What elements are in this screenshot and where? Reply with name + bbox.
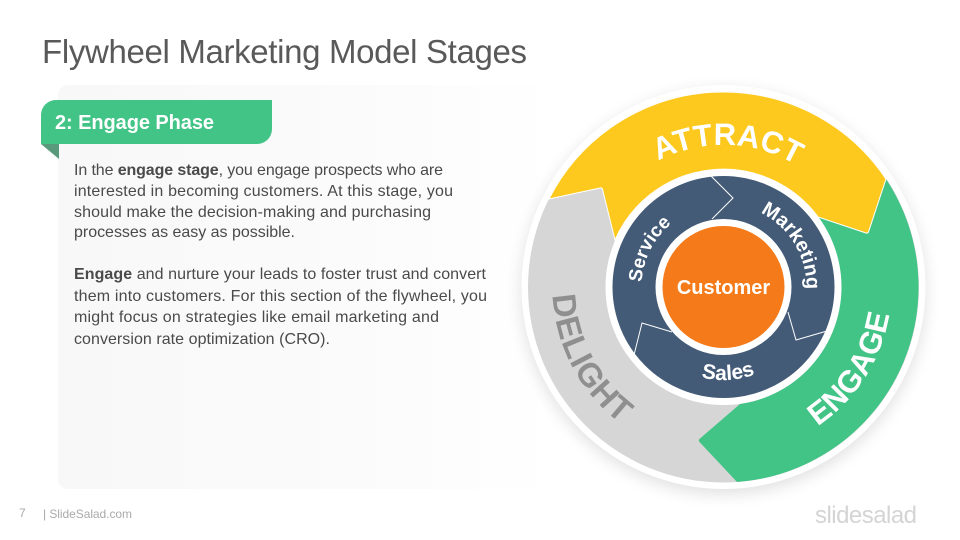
text block: engage description: should make the decision-making and purchasing [74, 204, 431, 221]
footer: page number: 7 [19, 506, 26, 520]
text block: engage description [74, 162, 487, 348]
label: customer: Customer [677, 277, 770, 299]
text block: engage description: Engage and nurture your leads to foster trust and convert [74, 266, 487, 283]
label: sales: Sales [702, 364, 754, 380]
text block: engage description: conversion rate optimization (CRO). [74, 331, 330, 348]
text block: engage description: them into customers. For this section of the flywheel, you [74, 288, 487, 305]
label: service: Service [629, 218, 670, 282]
heading banner: 2: Engage Phase: 2: Engage Phase [55, 112, 214, 134]
label: engage: ENGAGE [806, 312, 890, 426]
segment: delight [528, 92, 919, 482]
text block: engage description: interested in becoming customers. At this stage, you [74, 183, 453, 200]
inner ring dividers [634, 176, 827, 355]
heading banner: 2: Engage Phase [41, 100, 272, 159]
text block: engage description: might focus on strategies like email marketing and [74, 309, 439, 326]
centre ring [656, 219, 792, 355]
label: attract: ATTRACT [657, 124, 806, 162]
inner ring separator [606, 169, 842, 405]
inner ring: service, marketing, sales [612, 176, 834, 398]
flywheel diagram [517, 92, 930, 498]
footer: site name: | SlideSalad.com [43, 507, 132, 521]
centre: customer [662, 226, 784, 348]
panel: text background [58, 85, 558, 489]
segment: attract [549, 92, 886, 240]
label: delight: DELIGHT [552, 294, 635, 419]
text block: engage description: processes as easy as possible. [74, 224, 295, 241]
label: marketing: Marketing [762, 201, 818, 288]
title: Flywheel Marketing Model Stages [42, 33, 527, 70]
text block: engage description: In the engage stage, you engage prospects who are [74, 162, 443, 179]
segment: engage [699, 179, 919, 482]
footer: logo: slidesalad [815, 502, 917, 529]
